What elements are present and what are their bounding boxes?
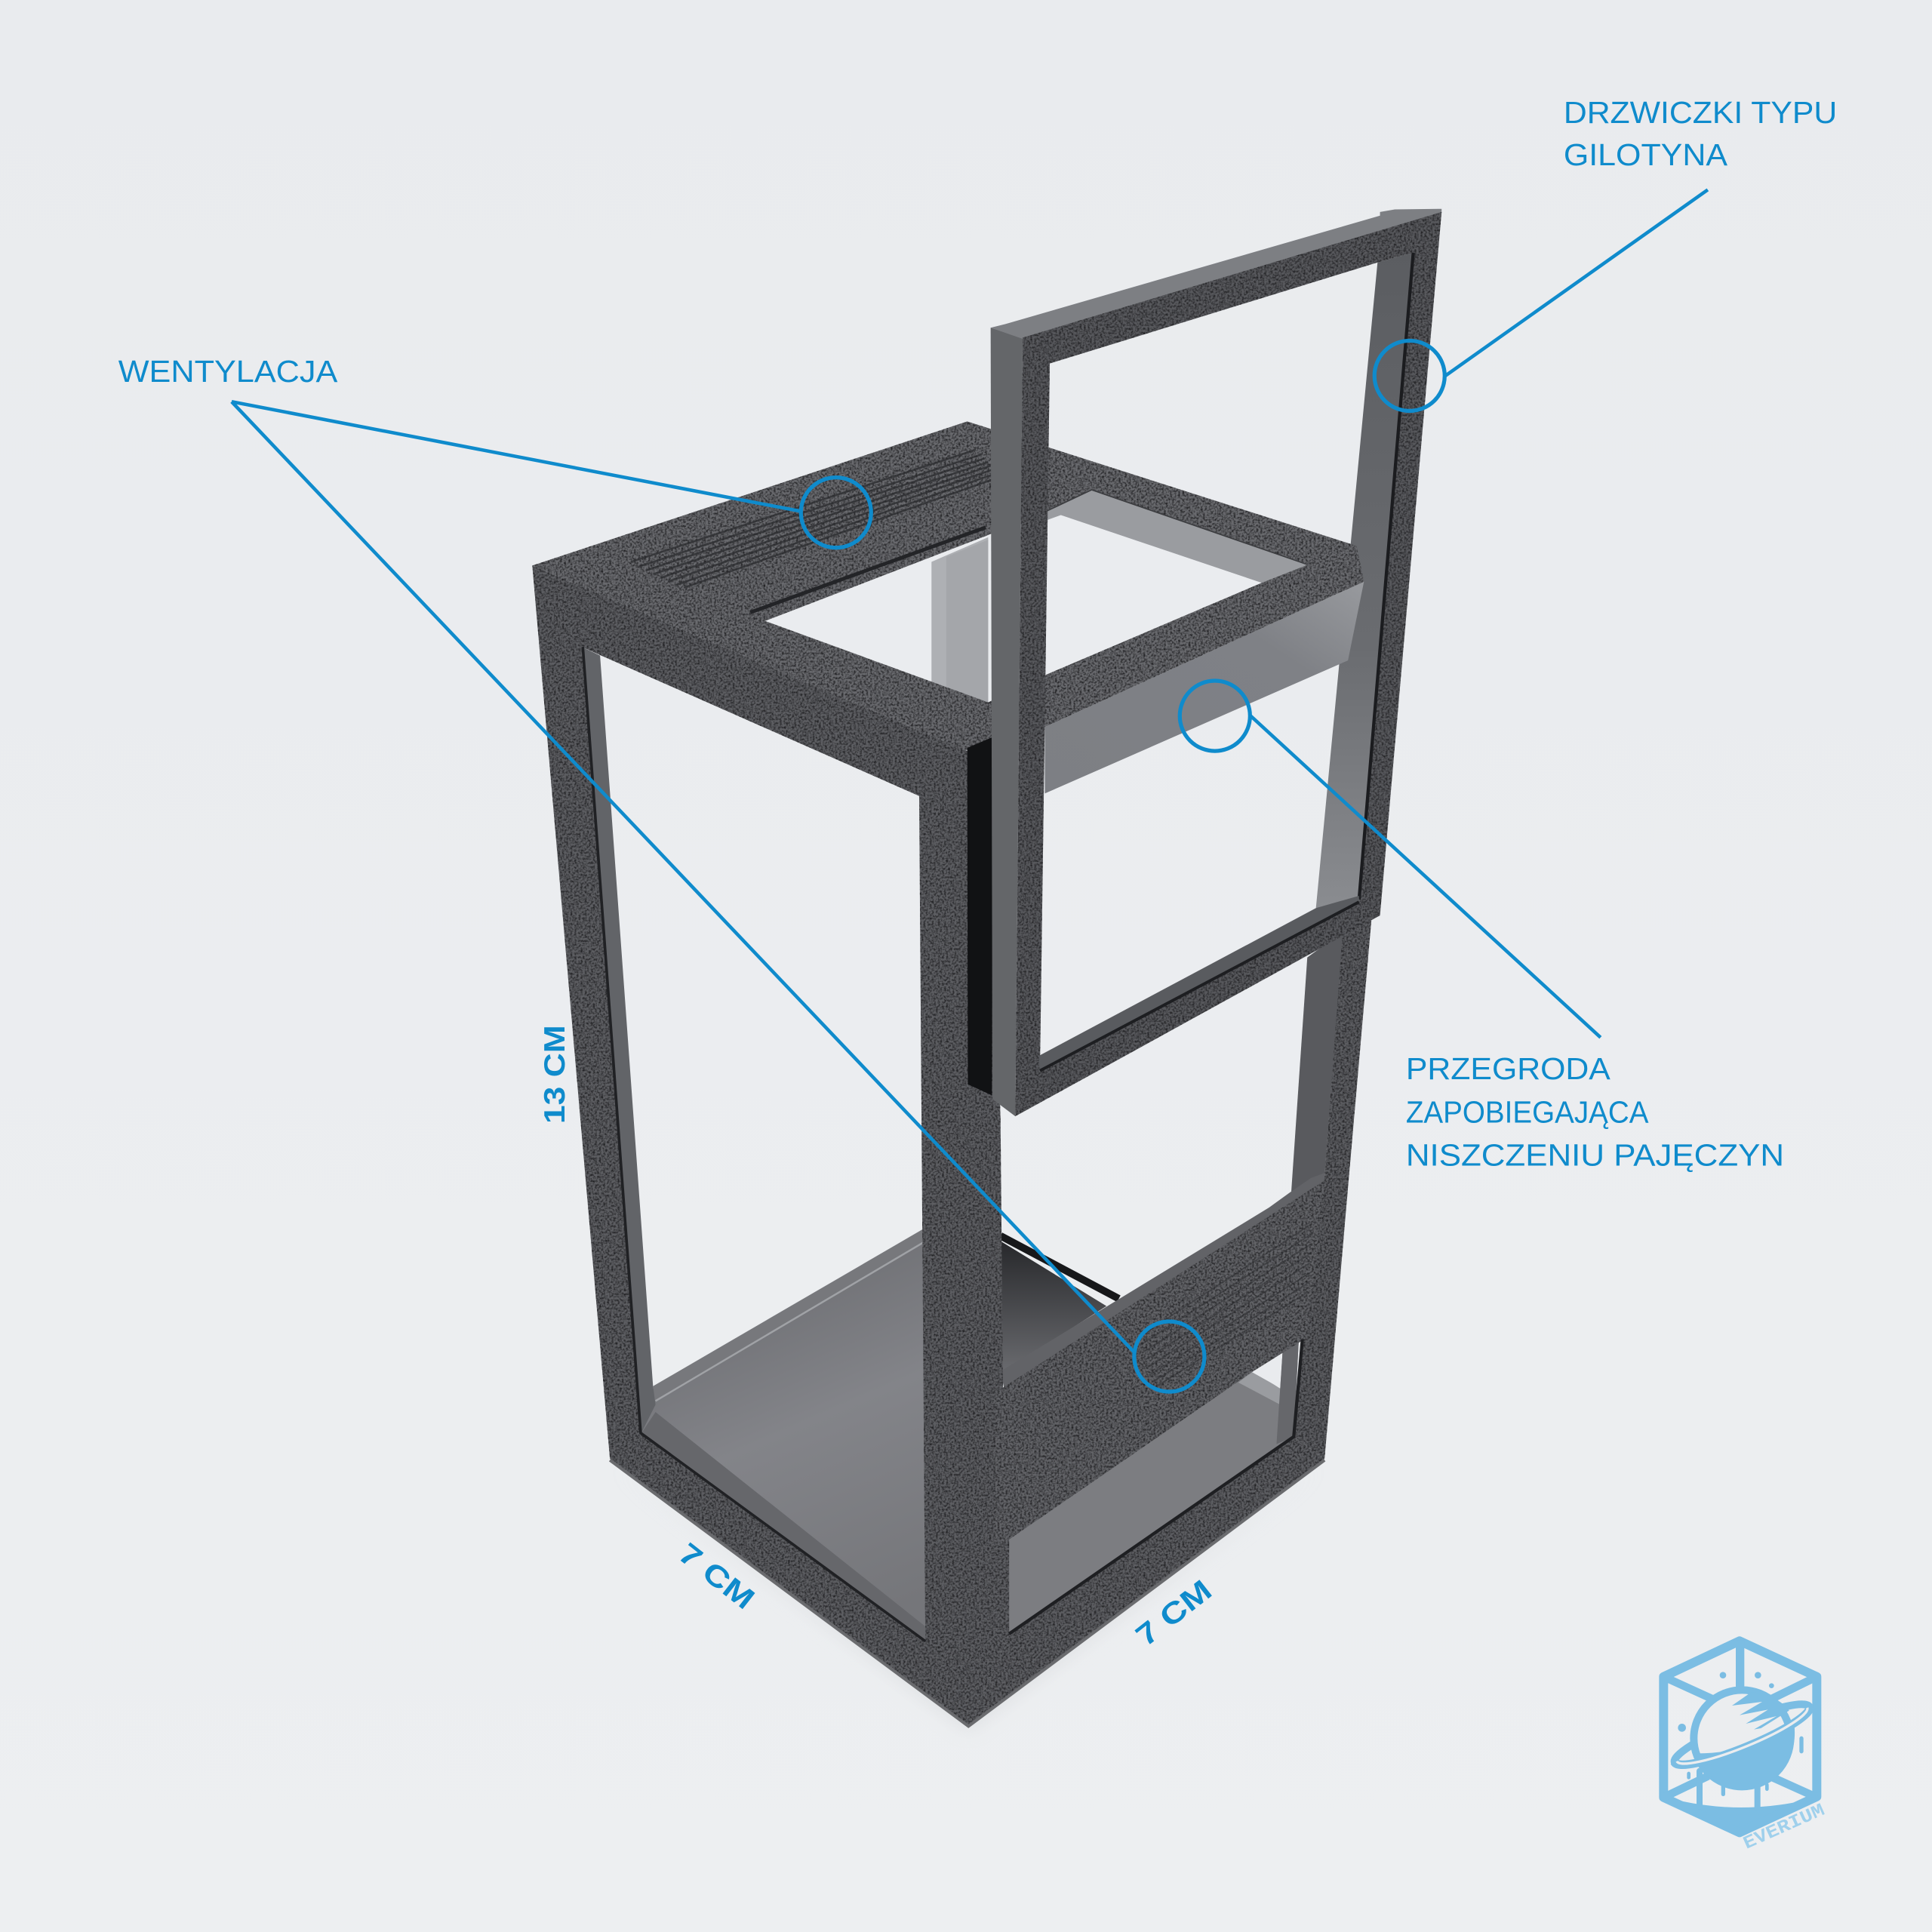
label: partition — [1406, 1051, 1784, 1172]
right post — [1294, 921, 1371, 1459]
door bottom groove — [1038, 896, 1359, 1072]
lower right window edge — [1009, 1340, 1303, 1634]
door frame textured — [1015, 212, 1441, 1116]
door right dark line — [1359, 253, 1414, 900]
bottom right rail — [968, 1437, 1324, 1726]
anti-web partition beam — [1044, 582, 1364, 793]
left frame with window — [532, 565, 1009, 1726]
logo hexagon — [1663, 1640, 1817, 1832]
floor shadow — [616, 1466, 1321, 1730]
logo ring front — [1675, 1707, 1814, 1774]
logo ring back — [1669, 1695, 1814, 1774]
logo wordmark: EVERIUM — [1740, 1801, 1828, 1854]
panel vent stripes — [1137, 1223, 1312, 1387]
marker: ventilation top — [801, 478, 871, 548]
line: partition — [1251, 716, 1601, 1038]
textured frame — [532, 421, 1371, 1726]
label: ventilation: WENTYLACJA — [118, 354, 338, 389]
logo planet highlights — [1732, 1693, 1789, 1730]
panel top edge — [1001, 1173, 1324, 1389]
bottom edge — [610, 1460, 1324, 1726]
logo floor — [1663, 1798, 1817, 1834]
logo planet — [1694, 1690, 1790, 1786]
logo stars — [1678, 1672, 1804, 1753]
far rim of top opening — [1048, 489, 1309, 583]
right post groove — [1291, 931, 1343, 1192]
marker: partition — [1180, 681, 1250, 751]
label: partition: NISZCZENIU PAJĘCZYN — [1406, 1137, 1784, 1172]
door side strip — [991, 328, 1023, 1116]
left window groove — [582, 647, 925, 1641]
top opening front dark edge — [750, 528, 986, 612]
door groove and far post — [1316, 253, 1414, 908]
door bottom dark line — [1040, 902, 1359, 1071]
floor of enclosure — [641, 1229, 1299, 1645]
label: guillotine door: DRZWICZKI TYPU — [1564, 95, 1837, 130]
top face with opening — [532, 421, 1364, 750]
black door shadow on post — [968, 737, 993, 1095]
label: partition: PRZEGRODA — [1406, 1051, 1611, 1086]
rear post seen through top opening — [931, 537, 988, 705]
logo: Everium — [1663, 1640, 1828, 1854]
enclosure: 3D terrarium — [532, 253, 1414, 1730]
label: guillotine door — [1564, 95, 1837, 172]
dimension: width 7 cm left: 7 CM — [672, 1537, 760, 1616]
door top strip — [991, 209, 1441, 339]
callout lines — [232, 189, 1708, 1392]
logo drips — [1689, 1771, 1767, 1807]
marker: ventilation panel — [1134, 1321, 1204, 1392]
label: partition: ZAPOBIEGAJĄCA — [1406, 1094, 1649, 1129]
line: ventilation top — [232, 401, 801, 512]
marker: door — [1374, 340, 1444, 411]
line: door — [1445, 189, 1708, 376]
top vent stripes — [631, 450, 993, 588]
guillotine door — [991, 209, 1441, 1116]
vent panel — [995, 1180, 1324, 1549]
label: guillotine door: GILOTYNA — [1564, 137, 1728, 172]
logo planet lower half — [1698, 1723, 1795, 1789]
line: ventilation panel — [232, 401, 1135, 1353]
dimension: width 7 cm right: 7 CM — [1130, 1574, 1218, 1653]
dimension: height 13 cm: 13 CM — [539, 1025, 571, 1124]
